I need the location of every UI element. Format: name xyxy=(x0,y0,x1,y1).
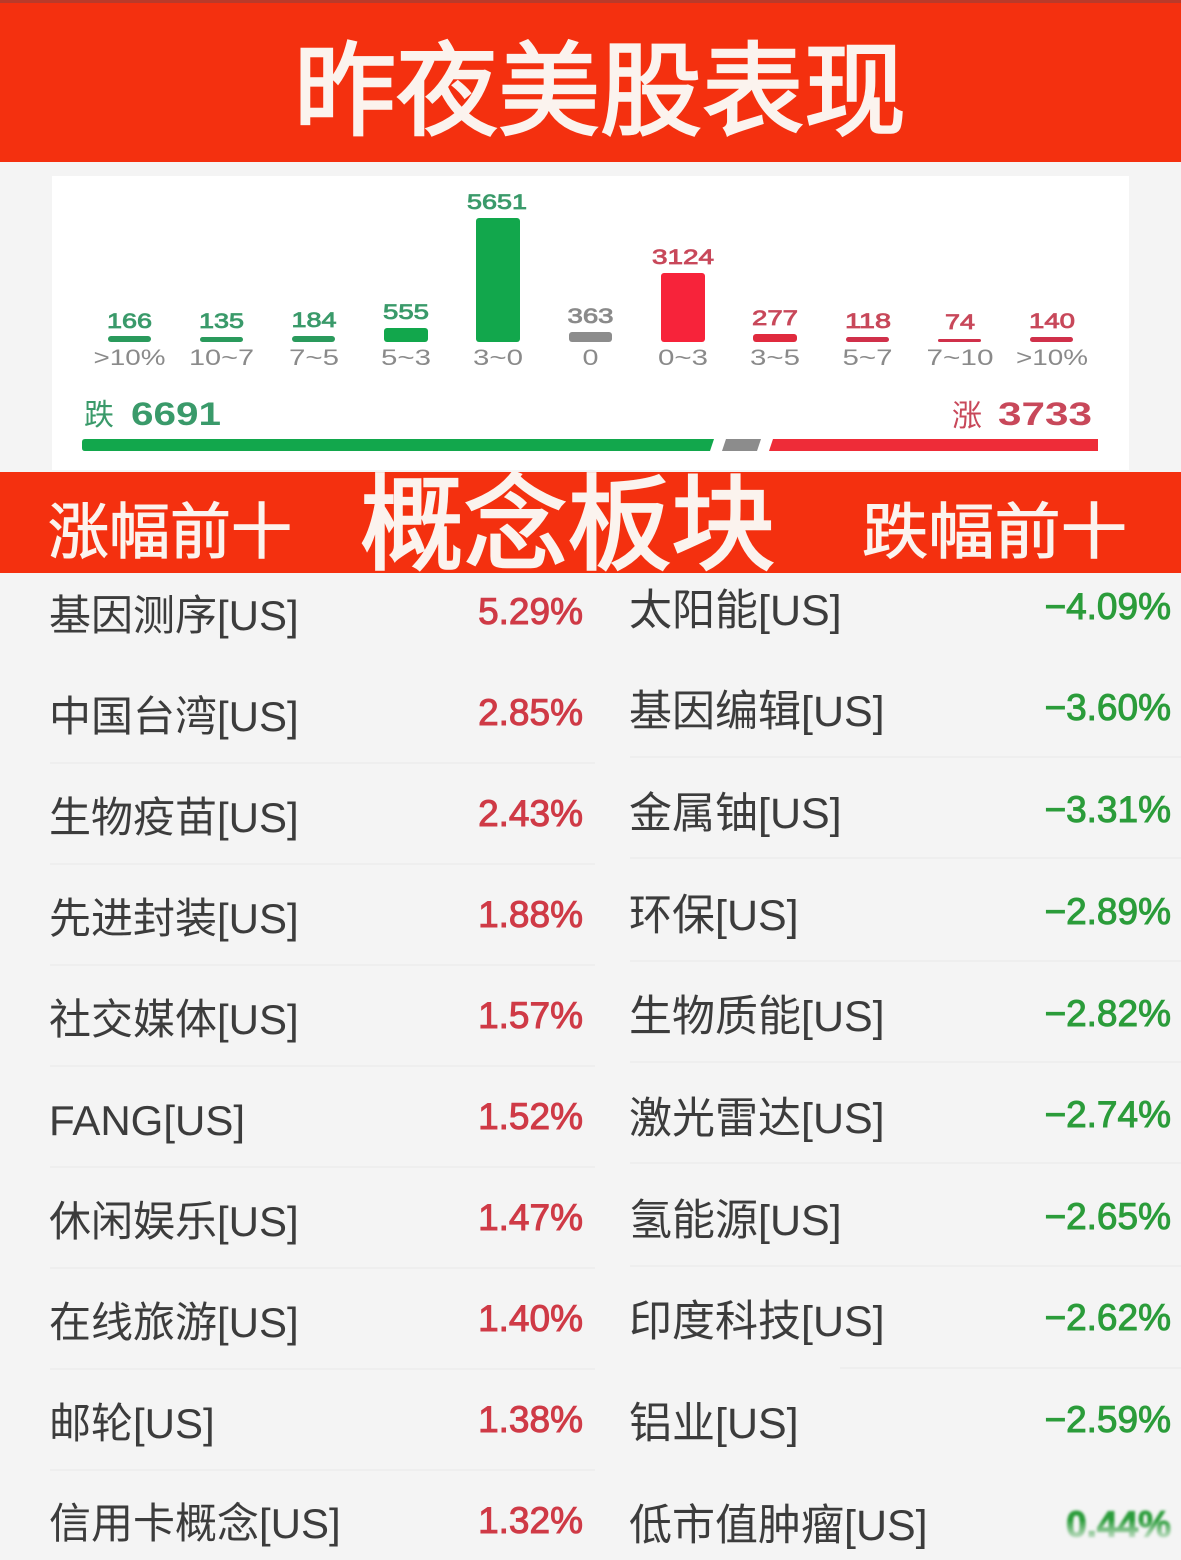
row 1: 5.29% xyxy=(478,591,583,632)
row 4: 环保[US] xyxy=(629,892,799,940)
row 10: 0.44% xyxy=(1066,1504,1171,1545)
bar value labels: 140 xyxy=(1029,310,1075,333)
bar value labels: 555 xyxy=(383,301,429,324)
row 9: −2.59% xyxy=(1044,1399,1171,1440)
row 6 xyxy=(629,1094,1171,1143)
list: top losers xyxy=(629,586,1181,1560)
bar value labels: 74 xyxy=(945,311,975,334)
row 1: −4.09% xyxy=(1044,586,1171,627)
bar range labels: 0 xyxy=(582,345,598,370)
bar value labels: 5651 xyxy=(467,191,527,214)
bar range labels: 10~7 xyxy=(189,345,254,370)
row 5: 1.57% xyxy=(478,995,583,1036)
row 7 xyxy=(629,1196,1171,1245)
row 5: −2.82% xyxy=(1044,993,1171,1034)
row 9 xyxy=(49,1399,583,1447)
bar range labels: 5~3 xyxy=(381,345,431,370)
row 10 xyxy=(49,1500,583,1547)
bar value labels: 166 xyxy=(107,310,152,333)
row 2 xyxy=(49,692,583,740)
bar chart: unchanged xyxy=(569,332,612,342)
row 5: 社交媒体[US] xyxy=(49,996,299,1043)
total decliners label: 跌 xyxy=(84,390,114,434)
row 9 xyxy=(629,1399,1171,1448)
bar range labels: 7~10 xyxy=(926,345,994,370)
row 10: 1.32% xyxy=(478,1500,583,1541)
row 1: 基因测序[US] xyxy=(49,592,299,639)
row 5 xyxy=(629,993,1171,1041)
row 8: 在线旅游[US] xyxy=(49,1299,299,1346)
row 2: 基因编辑[US] xyxy=(629,688,885,736)
row 5 xyxy=(49,995,583,1043)
list: top gainers xyxy=(49,591,583,1547)
row 6: 激光雷达[US] xyxy=(629,1095,885,1143)
row 8: 1.40% xyxy=(478,1298,583,1339)
bar value labels: 3124 xyxy=(652,246,714,269)
bar value labels: 277 xyxy=(752,307,798,330)
row 4: −2.89% xyxy=(1044,891,1171,932)
row 2: −3.60% xyxy=(1044,687,1171,728)
row 7 xyxy=(49,1197,583,1245)
row 8 xyxy=(629,1297,1171,1346)
row 6: −2.74% xyxy=(1044,1094,1171,1135)
row 4: 先进封装[US] xyxy=(49,895,299,942)
row 3 xyxy=(49,793,583,841)
row 2 xyxy=(629,687,1171,736)
row 8: −2.62% xyxy=(1044,1297,1171,1338)
bar value labels: 135 xyxy=(199,310,244,333)
row 4 xyxy=(629,891,1171,940)
section band: concept sectors xyxy=(0,440,1181,591)
row 1 xyxy=(629,586,1171,635)
ratio bar xyxy=(82,439,1098,451)
heading: concept sectors: 概念板块 xyxy=(360,440,775,591)
row 7: 1.47% xyxy=(478,1197,583,1238)
bar chart: advancers xyxy=(661,273,1073,342)
row 9: 邮轮[US] xyxy=(49,1400,215,1447)
row 10: 信用卡概念[US] xyxy=(49,1500,341,1547)
bar value labels: 363 xyxy=(568,305,614,328)
row 1 xyxy=(49,591,583,639)
title: 昨夜美股表现 xyxy=(294,10,906,157)
total decliners label: 6691 xyxy=(131,396,221,432)
bar range labels: 3~0 xyxy=(473,345,523,370)
bar range labels: 5~7 xyxy=(842,345,892,370)
row 8: 印度科技[US] xyxy=(629,1298,885,1346)
row 5: 生物质能[US] xyxy=(629,993,885,1041)
row 3: 生物疫苗[US] xyxy=(49,794,299,841)
row 1: 太阳能[US] xyxy=(629,587,842,635)
row 4 xyxy=(49,894,583,942)
bar range labels: 3~5 xyxy=(750,345,800,370)
bar value labels xyxy=(107,191,1075,334)
row 10 xyxy=(629,1502,1181,1560)
bar value labels: 184 xyxy=(292,309,337,332)
row 9: 铝业[US] xyxy=(629,1400,799,1448)
row 3: −3.31% xyxy=(1044,789,1171,830)
row 8 xyxy=(49,1298,583,1346)
row 3: 金属铀[US] xyxy=(629,790,842,838)
row 7: 氢能源[US] xyxy=(629,1197,842,1245)
bar chart: decliners xyxy=(108,218,520,342)
heading: top losers: 跌幅前十 xyxy=(862,482,1127,571)
row 7: 休闲娱乐[US] xyxy=(49,1198,299,1245)
panel: market breadth chart xyxy=(52,176,1129,470)
total decliners label xyxy=(84,390,221,434)
bar value labels: 118 xyxy=(845,310,891,333)
row 10: 低市值肿瘤[US] xyxy=(629,1502,928,1550)
row 2: 2.85% xyxy=(478,692,583,733)
row 3 xyxy=(629,789,1171,838)
bar range labels: >10% xyxy=(94,345,166,370)
bar range labels: 7~5 xyxy=(289,345,339,370)
total advancers label: 涨 xyxy=(952,391,982,435)
header band xyxy=(0,0,1181,162)
bar range labels: >10% xyxy=(1016,345,1088,370)
row 6: FANG[US] xyxy=(49,1097,245,1144)
row 6: 1.52% xyxy=(478,1096,583,1137)
heading: top gainers: 涨幅前十 xyxy=(48,482,292,571)
row 2: 中国台湾[US] xyxy=(49,693,299,740)
row 3: 2.43% xyxy=(478,793,583,834)
bar range labels xyxy=(94,345,1088,370)
row 7: −2.65% xyxy=(1044,1196,1171,1237)
total advancers label xyxy=(952,391,1092,435)
row 9: 1.38% xyxy=(478,1399,583,1440)
row 4: 1.88% xyxy=(478,894,583,935)
row 6 xyxy=(49,1096,583,1144)
bar range labels: 0~3 xyxy=(658,345,708,370)
total advancers label: 3733 xyxy=(998,396,1092,432)
